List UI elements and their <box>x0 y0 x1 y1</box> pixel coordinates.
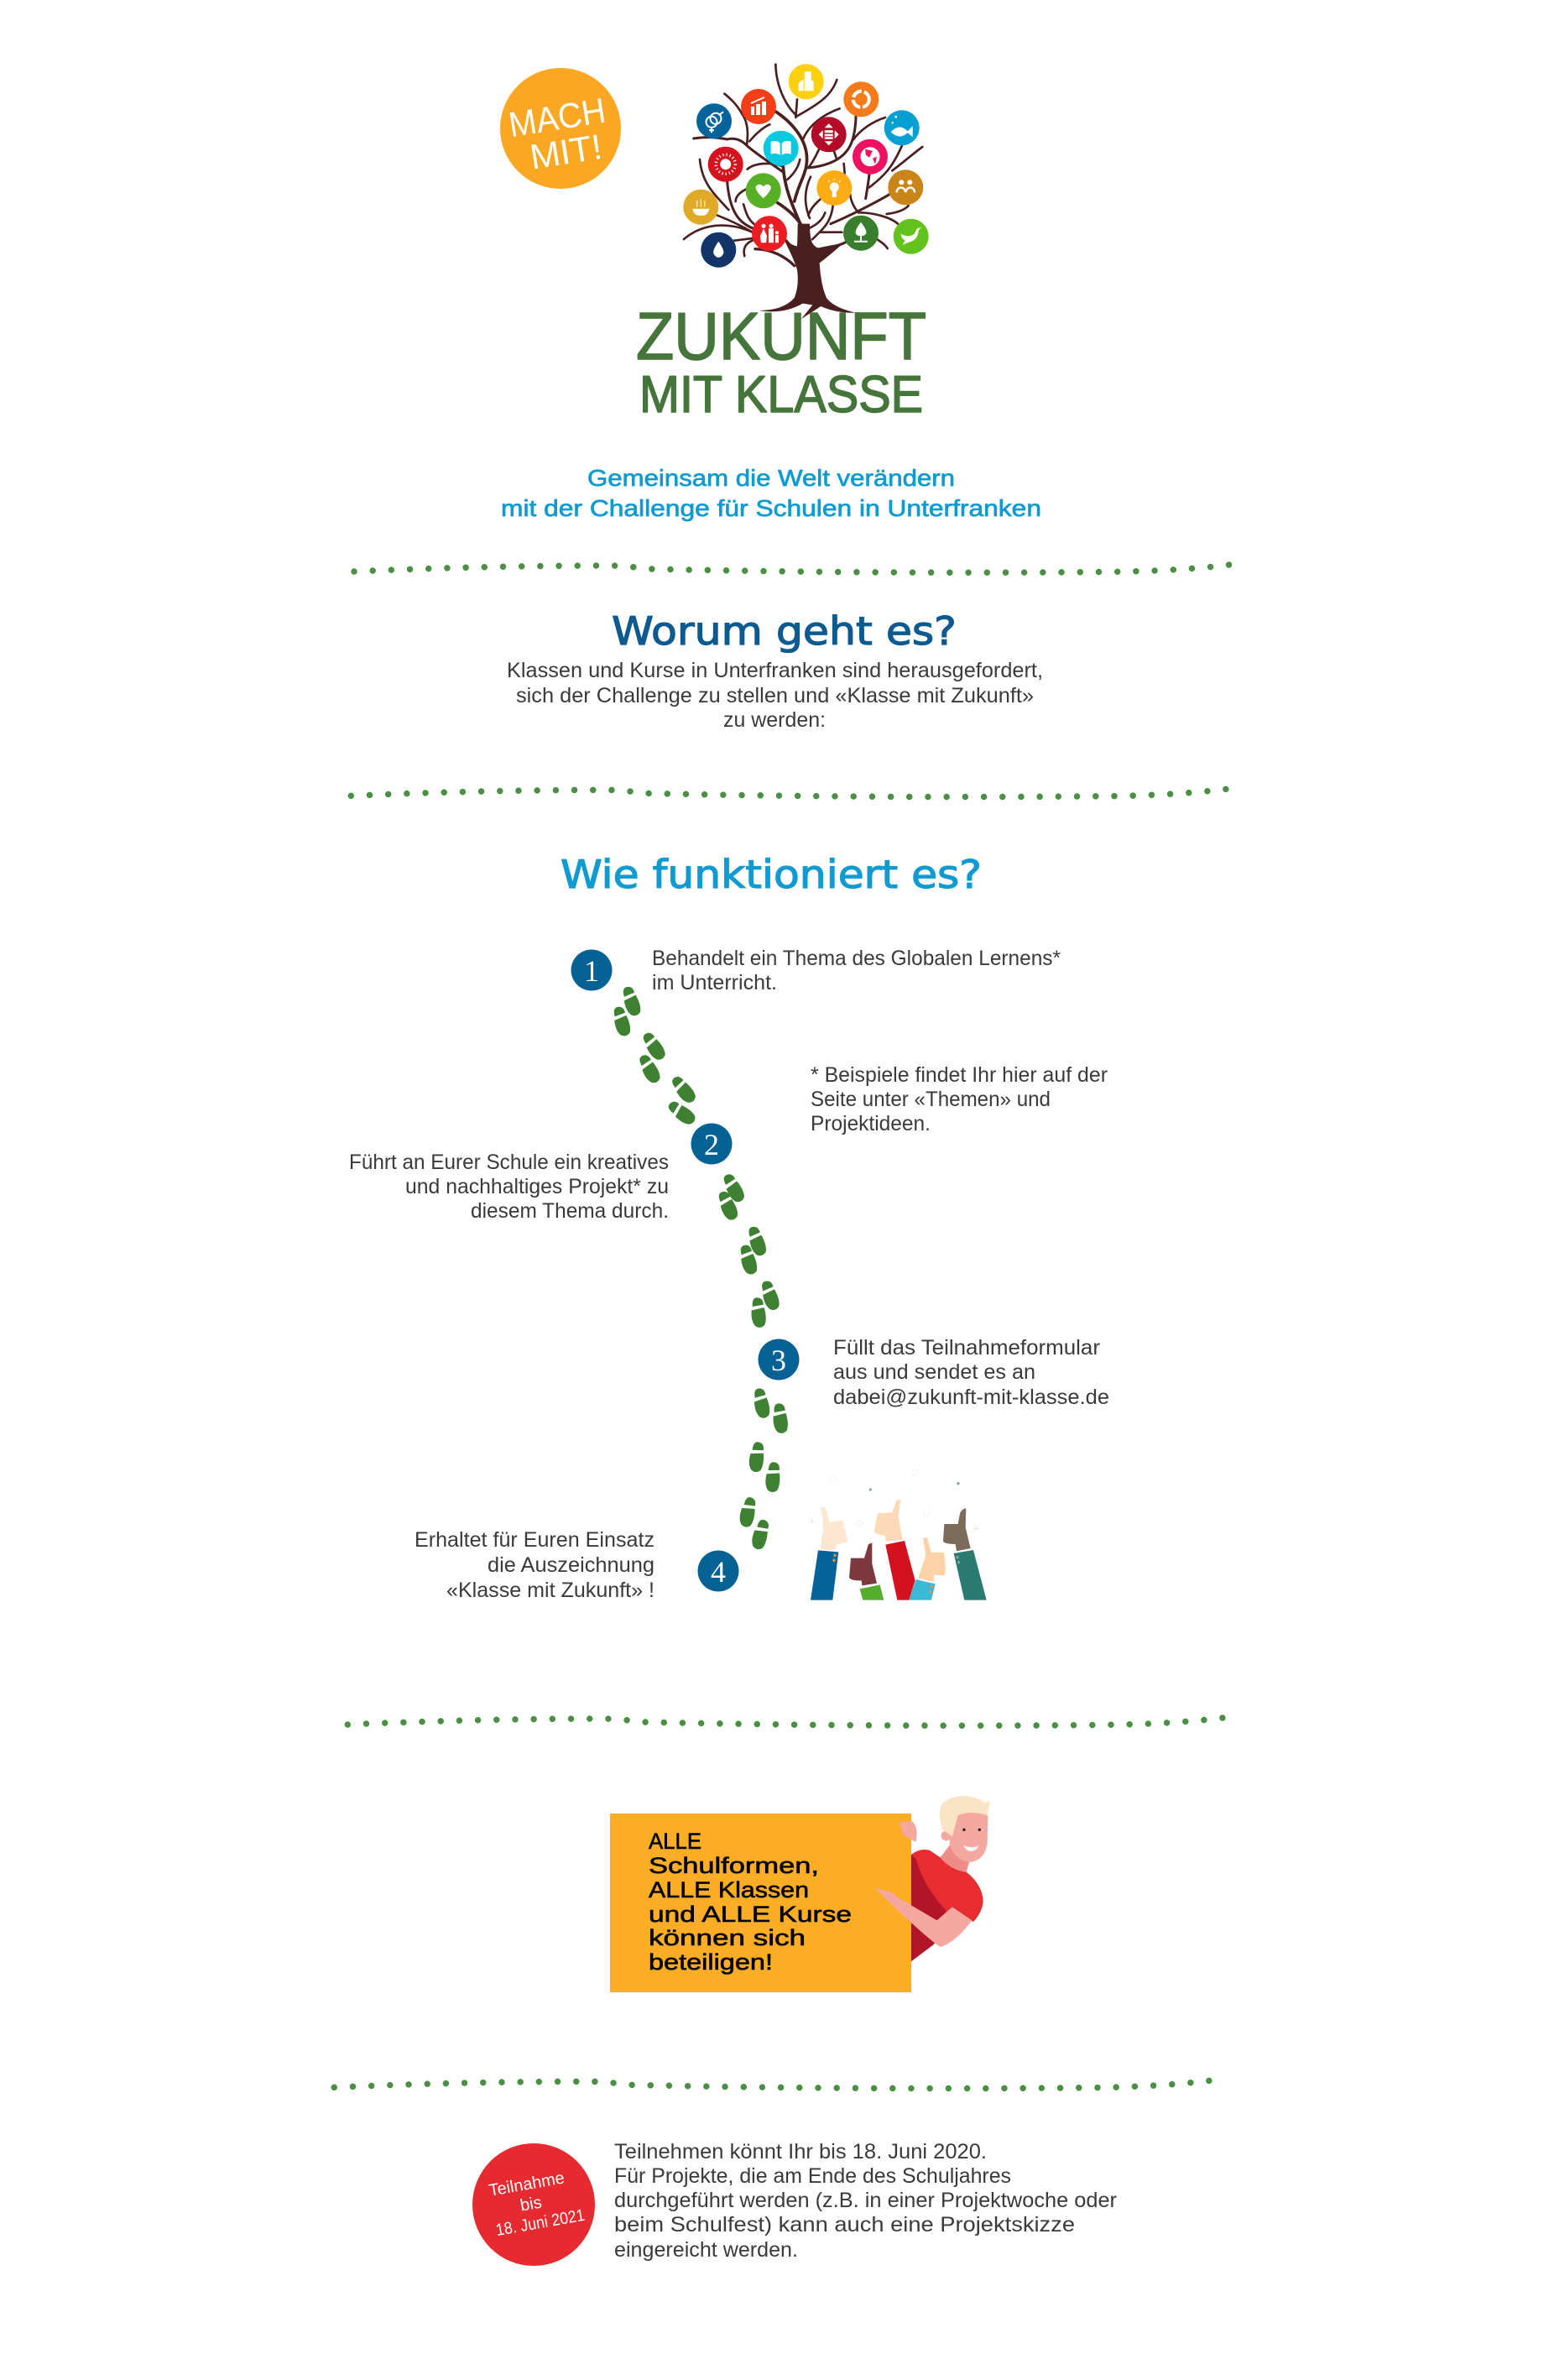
badge: Mach mit: MIT! <box>527 127 605 177</box>
callout text: und ALLE Kurse <box>649 1902 852 1927</box>
step 1 text <box>652 947 1061 994</box>
badge: deadline <box>472 2143 595 2266</box>
footprints: steps 3 to 4 <box>738 1387 788 1551</box>
deadline text <box>614 2140 1117 2262</box>
icon: sustainable cities <box>789 64 824 99</box>
intro text <box>507 659 1043 732</box>
heading: Wie funktioniert es: Wie funktioniert es? <box>561 852 982 897</box>
badge: Mach mit <box>500 68 621 189</box>
icon: partnership <box>888 170 923 205</box>
deadline text: beim Schulfest) kann auch eine Projektskizze <box>614 2213 1075 2236</box>
footnote: Projektideen. <box>811 1112 931 1135</box>
footnote <box>811 1063 1108 1135</box>
callout text <box>649 1829 852 1975</box>
step 3 text: dabei@zukunft-mit-klasse.de <box>833 1386 1109 1409</box>
step 3 marker: 3 <box>771 1344 786 1377</box>
step 3 marker <box>759 1339 799 1380</box>
step 2 text: und nachhaltiges Projekt* zu <box>405 1175 669 1198</box>
logo wordmark <box>636 299 926 424</box>
logo wordmark: ZUKUNFT <box>636 299 926 373</box>
step 4 marker <box>698 1551 738 1591</box>
badge: deadline: 18. Juni 2021 <box>494 2206 587 2240</box>
step 2 text: Führt an Eurer Schule ein kreatives <box>349 1151 669 1174</box>
icon: dove <box>894 219 929 254</box>
step 4 text: die Auszeichnung <box>488 1553 654 1577</box>
logo wordmark: MIT KLASSE <box>639 366 923 424</box>
icon: recycling <box>843 81 879 117</box>
icon: gender <box>696 103 732 138</box>
callout text: ALLE Klassen <box>649 1877 809 1902</box>
subtitle: mit der Challenge für Schulen in Unterfranken <box>501 495 1041 521</box>
icon: tree <box>843 216 879 251</box>
icon: globe <box>853 139 888 175</box>
deadline text: eingereicht werden. <box>614 2238 798 2262</box>
step 3 text: aus und sendet es an <box>833 1360 1035 1384</box>
step 4 text <box>415 1528 654 1602</box>
icon: energy <box>816 170 852 206</box>
icon: sun <box>708 147 743 182</box>
heading: Worum geht es: Worum geht es? <box>612 608 957 654</box>
intro text: zu werden: <box>723 708 826 732</box>
step 3 text <box>833 1336 1109 1409</box>
footnote: Seite unter «Themen» und <box>811 1088 1051 1111</box>
illustration: boy holding sign <box>875 1796 990 1961</box>
step 3 text: Füllt das Teilnahmeformular <box>833 1336 1100 1360</box>
tree trunk and branches <box>684 65 922 319</box>
badge: deadline: Teilnahme <box>488 2169 566 2200</box>
logo: tree <box>683 64 929 319</box>
subtitle: Gemeinsam die Welt verändern <box>587 465 955 491</box>
icon: education <box>764 131 799 166</box>
illustration: thumbs up <box>810 1469 987 1600</box>
deadline text: durchgeführt werden (z.B. in einer Projektwoche oder <box>614 2189 1117 2212</box>
icon: food bowl <box>683 190 718 225</box>
footprints: steps 1 to 3 <box>612 985 781 1328</box>
icon: water drop <box>701 232 736 268</box>
step 1 text: Behandelt ein Thema des Globalen Lernens* <box>652 947 1061 970</box>
intro text: Klassen und Kurse in Unterfranken sind herausgefordert, <box>507 659 1043 682</box>
step 2 text <box>349 1151 669 1223</box>
step 4 marker: 4 <box>711 1555 726 1589</box>
deadline text: Für Projekte, die am Ende des Schuljahres <box>614 2164 1011 2188</box>
deadline text: Teilnehmen könnt Ihr bis 18. Juni 2020. <box>614 2140 987 2163</box>
step 4 text: «Klasse mit Zukunft» ! <box>446 1579 654 1602</box>
step 1 marker <box>571 950 613 990</box>
badge: deadline: bis <box>519 2193 543 2216</box>
step 1 marker: 1 <box>584 954 599 988</box>
subtitle <box>501 465 1041 521</box>
step 1 text: im Unterricht. <box>652 971 777 994</box>
intro text: sich der Challenge zu stellen und «Klasse mit Zukunft» <box>516 684 1034 707</box>
step 2 marker: 2 <box>704 1128 719 1161</box>
callout text: Schulformen, <box>649 1853 819 1878</box>
icon: heart <box>746 173 781 208</box>
callout text: beteiligen! <box>649 1949 773 1975</box>
footnote: * Beispiele findet Ihr hier auf der <box>811 1063 1108 1087</box>
step 2 marker <box>691 1123 732 1165</box>
step 2 text: diesem Thema durch. <box>471 1199 669 1223</box>
icon: reduced inequalities <box>811 117 847 152</box>
step 4 text: Erhaltet für Euren Einsatz <box>415 1528 654 1552</box>
callout text: können sich <box>649 1925 806 1950</box>
badge: Mach mit: MACH <box>506 91 608 144</box>
icon: family <box>752 216 787 251</box>
callout text: ALLE <box>649 1829 701 1854</box>
icon: fish <box>884 110 920 145</box>
callout: all schools <box>610 1814 911 1992</box>
icon: growth <box>741 89 776 124</box>
